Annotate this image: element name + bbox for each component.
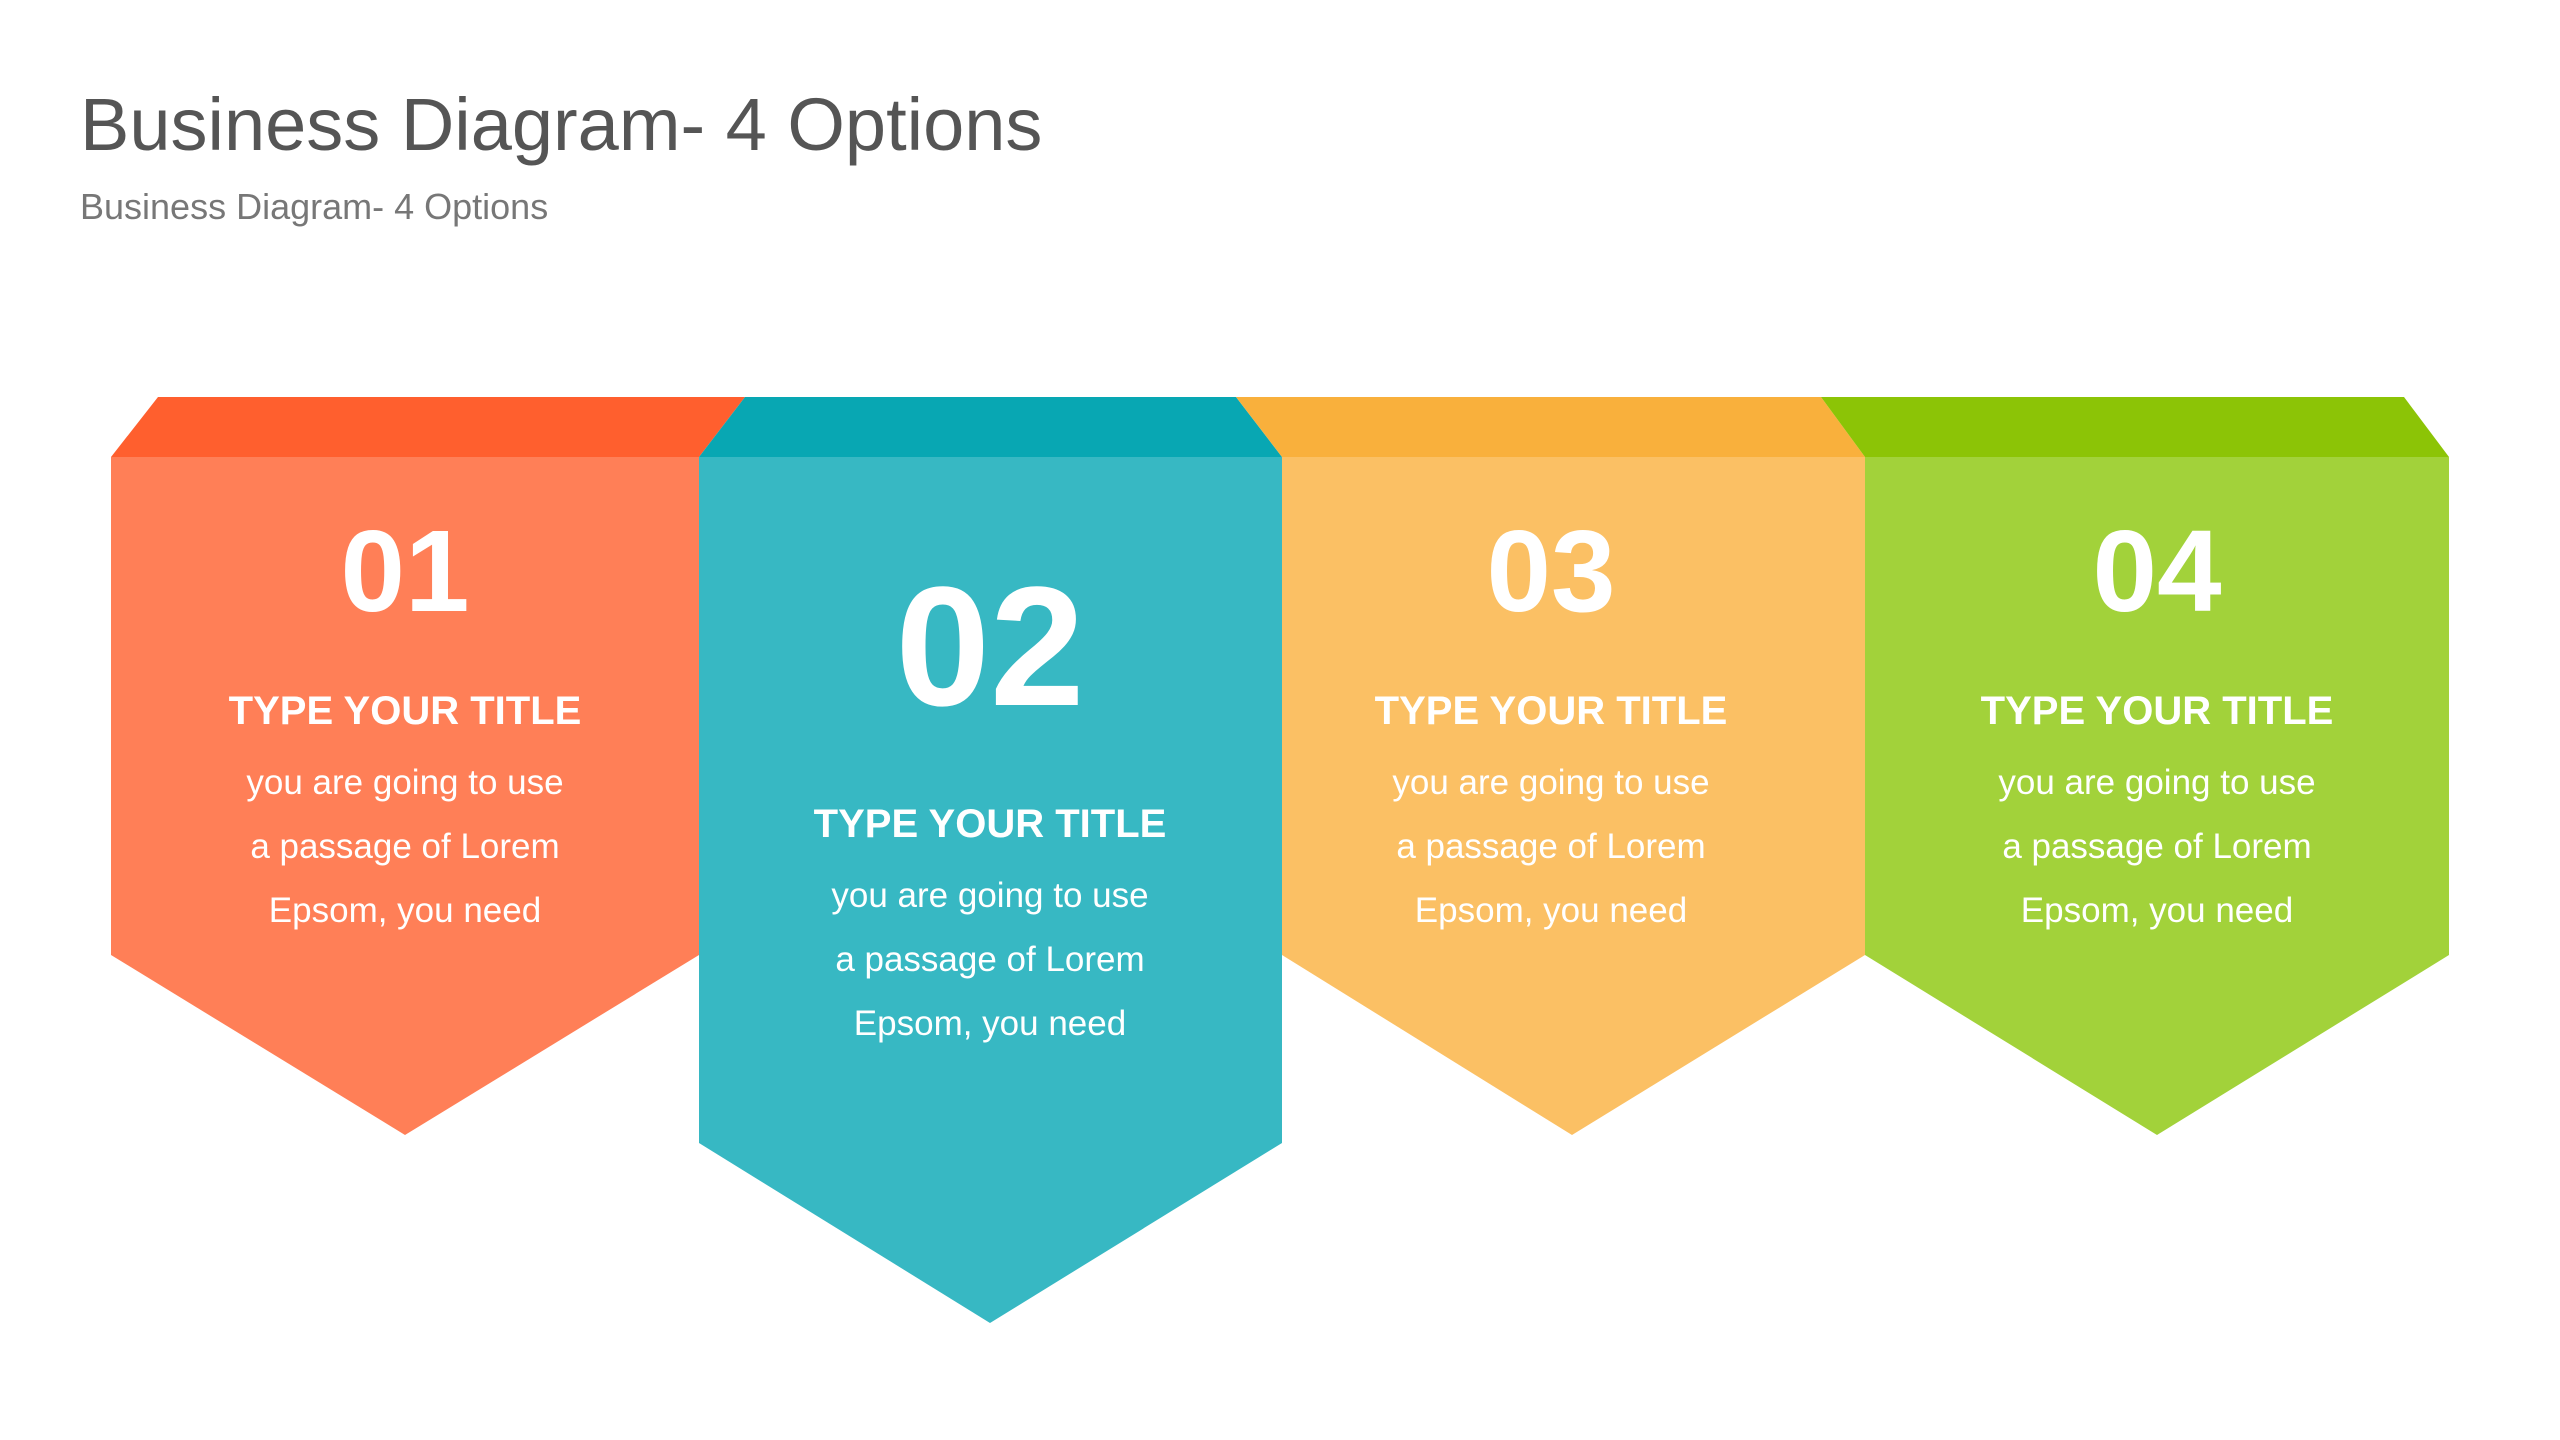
panel: option 03: you are going to use <box>1392 763 1710 802</box>
panel: option 02: TYPE YOUR TITLE <box>814 802 1166 846</box>
subtitle: Business Diagram- 4 Options <box>80 186 548 227</box>
panel: option 04: you are going to use <box>1998 763 2316 802</box>
panel: option 01 <box>111 397 745 1135</box>
panel: option 02: a passage of Lorem <box>835 940 1145 979</box>
panel: option 01: Epsom, you need <box>269 891 541 930</box>
panel: option 02: you are going to use <box>831 876 1149 915</box>
panel: option 03: TYPE YOUR TITLE <box>1375 689 1727 733</box>
panel: option 03: 03 <box>1486 506 1616 636</box>
panel: option 01: a passage of Lorem <box>250 827 560 866</box>
panel: option 04: 04 <box>2092 506 2222 636</box>
panel: option 03: Epsom, you need <box>1415 891 1687 930</box>
panel: option 01: TYPE YOUR TITLE <box>229 689 581 733</box>
panel: option 02 <box>699 397 1282 1323</box>
panel: option 04 <box>1821 397 2449 1135</box>
panel: option 01: 01 <box>340 506 470 636</box>
panel: option 02: Epsom, you need <box>854 1004 1126 1043</box>
panel: option 03 <box>1236 397 1865 1135</box>
panel: option 02: 02 <box>895 552 1085 742</box>
panel: option 03: a passage of Lorem <box>1396 827 1706 866</box>
panel: option 01: you are going to use <box>246 763 564 802</box>
panel: option 04: a passage of Lorem <box>2002 827 2312 866</box>
title: Business Diagram- 4 Options <box>80 83 1042 166</box>
panel: option 04: Epsom, you need <box>2021 891 2293 930</box>
panel: option 04: TYPE YOUR TITLE <box>1981 689 2333 733</box>
